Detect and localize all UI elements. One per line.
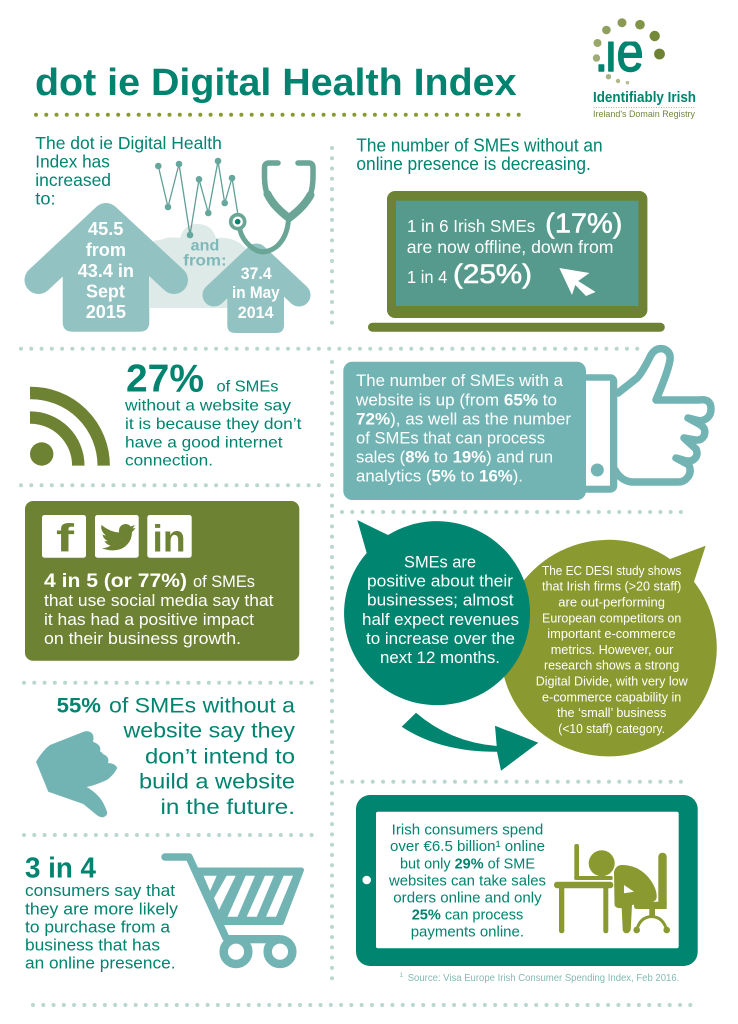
panel: 3 in 4 consumers (25, 853, 302, 972)
stat text: 3 in 4 (25, 853, 96, 885)
website text box: website is up (from 65% to (355, 391, 557, 409)
icon: facebook: f (56, 518, 75, 561)
stat text: of SMEs (216, 379, 278, 396)
arrow: curved (402, 713, 538, 771)
panel: positive SMEs speech bubble (344, 520, 530, 705)
stat text: they are more likely (25, 901, 179, 919)
tablet text (388, 821, 546, 940)
website text box: analytics (5% to 16%). (356, 468, 523, 486)
panel: thumbs up SMEs with website (343, 349, 711, 500)
logo: Identifiably Irish: .ie (595, 21, 644, 84)
website text box: sales (8% to 19%) and run (356, 448, 553, 466)
logo: Identifiably Irish: Identifiably Irish (593, 89, 696, 106)
stat text: business that has (25, 937, 160, 955)
icon: rss signal (30, 393, 104, 466)
tablet text: Irish consumers spend (392, 821, 543, 838)
logo: Identifiably Irish (593, 18, 696, 119)
panel: EC DESI speech bubble: The EC DESI study shows (542, 563, 682, 578)
stethoscope (231, 163, 313, 252)
big arrow (38, 217, 174, 332)
social media text: that use social media say that (44, 592, 274, 610)
panel: positive SMEs speech bubble: half expect revenues (362, 611, 519, 629)
panel: EC DESI speech bubble: e-commerce capability in (542, 689, 681, 704)
panel: EC DESI speech bubble: research shows a strong (544, 658, 679, 673)
small arrow (214, 255, 299, 333)
stat text: consumers say that (25, 882, 175, 900)
website text box: of SMEs that can process (356, 429, 545, 447)
big arrow text (78, 218, 134, 322)
stat text: it is because they don’t (125, 416, 302, 433)
statement text: website say they (122, 719, 295, 743)
statement text: don’t intend to (145, 744, 295, 768)
laptop text: 1 in 6 Irish SMEs (407, 216, 536, 236)
intro text (35, 133, 222, 208)
stat text: 27% (126, 358, 204, 401)
small arrow text: in May (232, 284, 280, 302)
laptop text: (25%) (453, 259, 532, 289)
panel: positive SMEs speech bubble: to increase over the (366, 630, 515, 648)
intro text: The dot ie Digital Health (35, 133, 222, 153)
icon: linkedin (147, 515, 192, 561)
panel: 27 percent internet (30, 358, 302, 470)
panel: EC DESI speech bubble: metrics. However, our (551, 642, 674, 657)
stat text: connection. (125, 453, 213, 470)
social media text: it has had a positive impact (44, 611, 254, 629)
footnote: 1 (400, 972, 404, 979)
cloud (150, 224, 262, 308)
intro text: increased (35, 170, 111, 190)
laptop text: (17%) (545, 207, 622, 238)
social media text: on their business growth. (44, 630, 241, 648)
big arrow text: 2015 (86, 301, 126, 322)
heading: online presence is decreasing. (356, 154, 591, 174)
panel: positive SMEs speech bubble: positive about their (367, 573, 514, 591)
website text box (343, 362, 586, 500)
icon: shopping cart (165, 857, 302, 964)
heading: The number of SMEs without an (356, 136, 603, 156)
small arrow text: 2014 (238, 304, 274, 322)
stat text (25, 853, 179, 972)
stat text: to purchase from a (25, 919, 171, 937)
panel: positive SMEs speech bubble: SMEs are (404, 553, 476, 571)
tablet text: over €6.5 billion¹ online (390, 838, 545, 855)
tablet text: websites can take sales (388, 872, 546, 889)
logo: Identifiably Irish: Ireland's Domain Registry (593, 109, 695, 119)
stat text: an online presence. (25, 954, 176, 972)
social media text (44, 571, 274, 648)
stat text: without a website say (124, 398, 291, 415)
website text box: 72%), as well as the number (356, 410, 572, 428)
statement text: of SMEs without a (109, 693, 295, 717)
social media text: of SMEs (193, 573, 255, 591)
panel: 55 percent no website (36, 693, 295, 819)
intro text: to: (35, 188, 56, 208)
laptop text (407, 207, 622, 289)
tablet text: 25% can process (412, 906, 523, 923)
panel: EC DESI speech bubble (500, 540, 717, 756)
big arrow text: from (86, 239, 126, 260)
icon: twitter (95, 515, 139, 558)
panel: EC DESI speech bubble: (<10 staff) category. (558, 721, 665, 736)
website text box: The number of SMEs with a (356, 372, 564, 390)
social media text: 4 in 5 (or 77%) (44, 571, 187, 592)
title: dot ie Digital Health Index (35, 62, 516, 104)
icon: facebook (42, 515, 86, 561)
and from label: and (191, 238, 219, 255)
big arrow text: 45.5 (88, 218, 123, 239)
intro text: Index has (35, 152, 110, 172)
stat text (124, 358, 302, 470)
panel: EC DESI speech bubble: important e-commerce (547, 626, 676, 641)
panel: EC DESI speech bubble: are out-performing (558, 594, 665, 610)
panel: EC DESI speech bubble: Digital Divide, with very low (536, 674, 688, 688)
icon: thumbs up (580, 349, 711, 493)
panel: index increase (35, 133, 313, 333)
laptop (368, 191, 665, 332)
panel: EC DESI speech bubble: European competitors on (542, 610, 681, 625)
and from label (183, 238, 227, 270)
statement text (57, 693, 295, 819)
panel: EC DESI speech bubble: the ‘small’ business (557, 705, 667, 720)
heading (356, 136, 603, 174)
and from label: from: (183, 253, 227, 270)
panel: social media (25, 501, 299, 661)
laptop text: 1 in 4 (407, 267, 448, 287)
laptop text: are now offline, down from (407, 237, 614, 257)
tablet text: orders online and only (393, 889, 542, 906)
big arrow text: Sept (86, 280, 125, 302)
panel: EC DESI speech bubble: that Irish firms (>20 staff) (542, 579, 681, 594)
big arrow text: 43.4 in (78, 260, 134, 281)
tablet text: payments online. (411, 923, 524, 940)
panel: offline SMEs (356, 136, 665, 332)
icon: linkedin: in (152, 519, 186, 561)
statement text: build a website (139, 769, 295, 793)
panel: tablet (356, 795, 698, 966)
small arrow text (232, 265, 280, 322)
panel: positive SMEs speech bubble: next 12 months. (380, 649, 500, 667)
statement text: 55% (57, 693, 101, 717)
heartbeat line (155, 158, 238, 238)
panel: positive SMEs speech bubble: businesses; almost (367, 592, 514, 610)
footnote: Source: Visa Europe Irish Consumer Spending Index, Feb 2016. (408, 973, 679, 984)
icon: thumbs down (36, 731, 117, 817)
stat text: have a good internet (125, 434, 283, 451)
small arrow text: 37.4 (241, 265, 272, 283)
tablet text: but only 29% of SME (400, 855, 535, 872)
icon: cursor (559, 268, 596, 296)
statement text: in the future. (160, 795, 295, 819)
icon: person slumped at desk (554, 844, 670, 933)
